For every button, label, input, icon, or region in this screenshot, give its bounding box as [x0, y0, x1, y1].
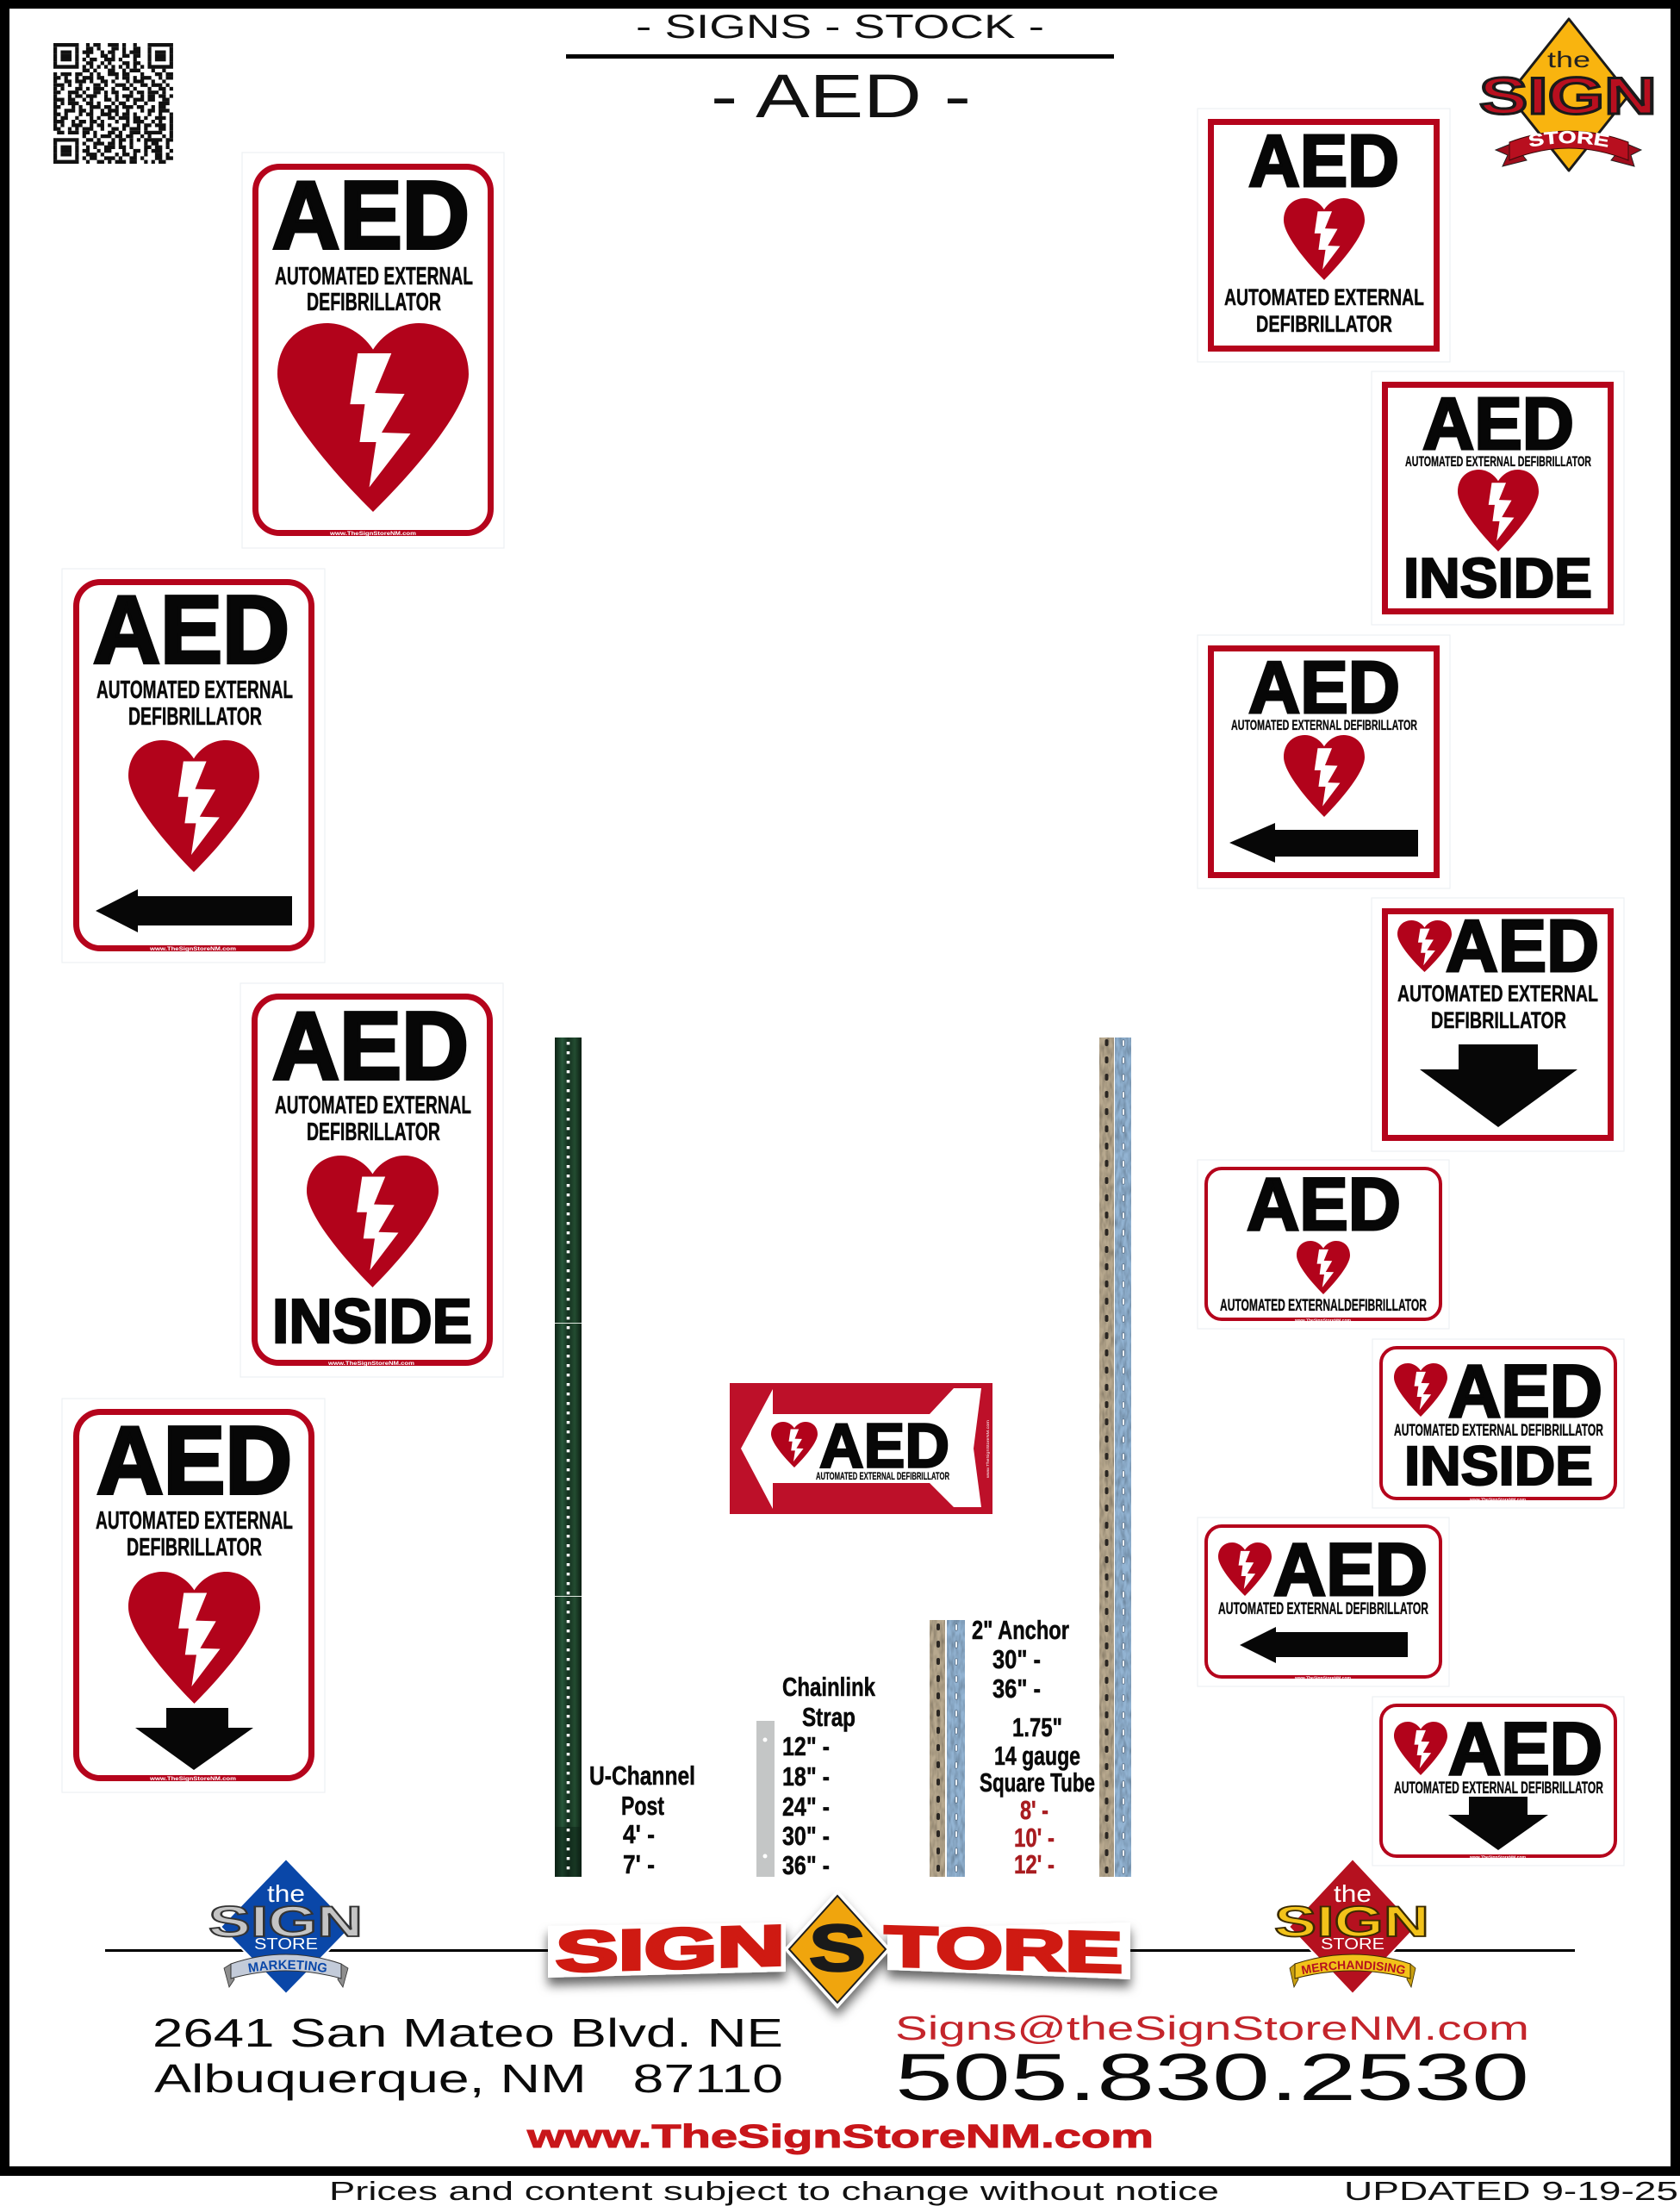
- title underline: [566, 54, 1114, 59]
- label: 2 inch anchor: 30" -: [992, 1644, 1041, 1674]
- sign: AED with left arrow: AUTOMATED EXTERNAL: [96, 676, 293, 704]
- sign: AED wide inside: INSIDE: [1404, 1435, 1593, 1497]
- sign: AED wide with left arrow: AUTOMATED EXTERNAL DEFIBRILLATOR: [1218, 1600, 1428, 1618]
- label: square tube: 12' -: [1014, 1849, 1055, 1879]
- label: u-channel post: 4' -: [623, 1819, 655, 1849]
- U-channel post: [555, 1038, 582, 1877]
- sign: red AED arrow: AED: [819, 1411, 949, 1480]
- sign: AED square with heart and text: AED: [1248, 121, 1399, 203]
- sign: AED wide with heart: AED: [1247, 1163, 1401, 1246]
- sign: red AED arrow: www.TheSignStoreNM.com: [986, 1420, 990, 1478]
- sign: AED square with left arrow: AUTOMATED EXTERNAL DEFIBRILLATOR: [1231, 717, 1417, 733]
- 2 inch anchor: [930, 1620, 965, 1877]
- sign: AED with down arrow portrait: [62, 1399, 325, 1792]
- label: u-channel post: U-Channel: [589, 1760, 695, 1791]
- sign: AED wide inside: AED: [1448, 1350, 1602, 1433]
- logo: sign store main: S: [809, 1912, 866, 1985]
- sign: AED wide with left arrow: AED: [1273, 1529, 1428, 1611]
- sign: AED with down arrow portrait: www.TheSignStoreNM.com: [149, 1777, 236, 1782]
- logo: sign store main: [548, 1890, 1130, 2009]
- sign: red AED arrow: [730, 1383, 992, 1514]
- email: Signs@theSignStoreNM.com: [895, 2010, 1529, 2047]
- sign: AED square with left arrow: [1198, 635, 1450, 888]
- label: square tube: 10' -: [1014, 1823, 1055, 1853]
- sign: AED wide with heart: www.TheSignStoreNM.com: [1294, 1318, 1351, 1322]
- sign: AED square with heart and text: [1198, 109, 1450, 362]
- label: chainlink strap: 18" -: [782, 1761, 830, 1792]
- logo: the sign store (top right): STORE: [1528, 131, 1609, 147]
- logo: sign store marketing: MARKETING: [248, 1960, 327, 1972]
- sign: AED with left arrow: www.TheSignStoreNM.com: [149, 947, 236, 952]
- QR code: [53, 45, 173, 162]
- disclaimer: Prices and content subject to change without notice: [329, 2176, 1219, 2206]
- sign: AED square with down arrow: [1372, 898, 1624, 1151]
- logo: sign store merchandising: SIGN: [1274, 1898, 1429, 1946]
- label: chainlink strap: 30" -: [782, 1821, 830, 1851]
- address: Albuquerque, NM 87110: [154, 2056, 783, 2101]
- sign: AED square with left arrow: AED: [1248, 647, 1400, 729]
- logo: sign store merchandising: STORE: [1321, 1935, 1384, 1953]
- sign: red AED arrow: AUTOMATED EXTERNAL DEFIBRILLATOR: [816, 1470, 949, 1482]
- sign: AED inside portrait: AED: [272, 993, 469, 1100]
- phone number: 505.830.2530: [895, 2041, 1529, 2115]
- sign: AED inside square: AED: [1422, 383, 1574, 465]
- logo: the sign store (top right): [1478, 17, 1657, 172]
- sign: AED with left arrow: DEFIBRILLATOR: [128, 703, 262, 731]
- label: u-channel post: Post: [621, 1791, 664, 1821]
- logo: sign store main: TORE: [885, 1914, 1123, 1985]
- sign: AED square with down arrow: AED: [1446, 906, 1599, 988]
- label: chainlink strap: 24" -: [782, 1792, 830, 1822]
- sign: AED wide with heart: AUTOMATED EXTERNALDEFIBRILLATOR: [1220, 1297, 1427, 1315]
- sign: AED inside portrait: www.TheSignStoreNM.com: [327, 1362, 414, 1367]
- address: [152, 2010, 783, 2101]
- sign: AED with left arrow: AED: [93, 576, 289, 683]
- footer horizontal rule: [105, 1949, 1575, 1952]
- sign: AED inside portrait: AUTOMATED EXTERNAL: [275, 1092, 471, 1119]
- logo: the sign store (top right): SIGN: [1479, 67, 1657, 125]
- sign: AED automated external defibrillator with large heart: AED: [272, 162, 470, 269]
- label: chainlink strap: [782, 1672, 876, 1880]
- sign: AED square with heart and text: AUTOMATED EXTERNAL: [1224, 284, 1424, 310]
- label: chainlink strap: 36" -: [782, 1850, 830, 1880]
- sign: AED automated external defibrillator with large heart: AUTOMATED EXTERNAL: [275, 263, 473, 290]
- chainlink strap: [756, 1721, 775, 1877]
- sign: AED wide with left arrow: [1198, 1517, 1449, 1686]
- sign: AED wide inside: www.TheSignStoreNM.com: [1469, 1498, 1526, 1501]
- updated date: UPDATED 9-19-25: [1344, 2176, 1678, 2206]
- sign: AED wide with down arrow: AED: [1448, 1708, 1602, 1791]
- logo: sign store marketing: [208, 1860, 363, 1992]
- sign: AED square with down arrow: DEFIBRILLATOR: [1431, 1007, 1566, 1033]
- logo: the sign store (top right): the: [1547, 47, 1590, 72]
- label: square tube: 14 gauge: [994, 1741, 1080, 1771]
- sign: AED square with heart and text: DEFIBRILLATOR: [1256, 311, 1392, 337]
- label: u-channel post: [589, 1760, 695, 1879]
- logo: sign store main: SIGN: [556, 1913, 785, 1984]
- sign: AED wide with left arrow: www.TheSignStoreNM.com: [1294, 1675, 1351, 1680]
- sign: AED with down arrow portrait: AED: [96, 1407, 292, 1514]
- sign: AED automated external defibrillator with large heart: [242, 153, 504, 548]
- label: chainlink strap: Strap: [802, 1702, 856, 1732]
- sign: AED with down arrow portrait: DEFIBRILLATOR: [127, 1534, 262, 1561]
- title: AED: - AED -: [711, 63, 971, 131]
- label: u-channel post: 7' -: [623, 1849, 655, 1879]
- sign: AED with left arrow: [62, 569, 325, 963]
- label: 2 inch anchor: [972, 1615, 1069, 1704]
- logo: sign store merchandising: [1274, 1860, 1429, 1992]
- sign: AED wide with down arrow: [1372, 1697, 1624, 1866]
- sign: AED inside portrait: [240, 983, 503, 1377]
- sign: AED wide inside: [1372, 1339, 1624, 1508]
- label: chainlink strap: 12" -: [782, 1731, 830, 1761]
- title: signs stock: - SIGNS - STOCK -: [636, 9, 1044, 46]
- label: square tube: 1.75": [1012, 1712, 1062, 1742]
- sign: AED inside square: [1372, 371, 1624, 625]
- sign: AED inside portrait: DEFIBRILLATOR: [307, 1119, 440, 1146]
- label: square tube: 8' -: [1020, 1795, 1048, 1825]
- sign: AED wide with down arrow: www.TheSignStoreNM.com: [1469, 1854, 1526, 1860]
- website: www.TheSignStoreNM.com: [526, 2119, 1154, 2155]
- sign: AED square with down arrow: AUTOMATED EXTERNAL: [1397, 981, 1598, 1006]
- label: square tube: Square Tube: [980, 1767, 1095, 1798]
- label: square tube: [980, 1712, 1095, 1879]
- sign: AED inside portrait: INSIDE: [272, 1287, 472, 1356]
- logo: sign store merchandising: the: [1334, 1880, 1372, 1907]
- label: 2 inch anchor: 2" Anchor: [972, 1615, 1069, 1645]
- sign: AED wide with heart: [1198, 1160, 1449, 1329]
- logo: sign store merchandising: MERCHANDISING: [1301, 1960, 1405, 1975]
- label: chainlink strap: Chainlink: [782, 1672, 876, 1702]
- label: 2 inch anchor: 36" -: [992, 1673, 1041, 1704]
- square tube post: [1099, 1038, 1131, 1877]
- sign: AED automated external defibrillator with large heart: DEFIBRILLATOR: [307, 289, 441, 316]
- logo: sign store marketing: SIGN: [208, 1898, 363, 1946]
- logo: sign store marketing: the: [267, 1880, 305, 1907]
- sign: AED with down arrow portrait: AUTOMATED EXTERNAL: [96, 1507, 293, 1535]
- sign: AED inside square: INSIDE: [1403, 546, 1592, 609]
- sign: AED automated external defibrillator with large heart: www.TheSignStoreNM.com: [329, 532, 416, 537]
- logo: sign store marketing: STORE: [254, 1935, 318, 1953]
- address: 2641 San Mateo Blvd. NE: [152, 2010, 783, 2055]
